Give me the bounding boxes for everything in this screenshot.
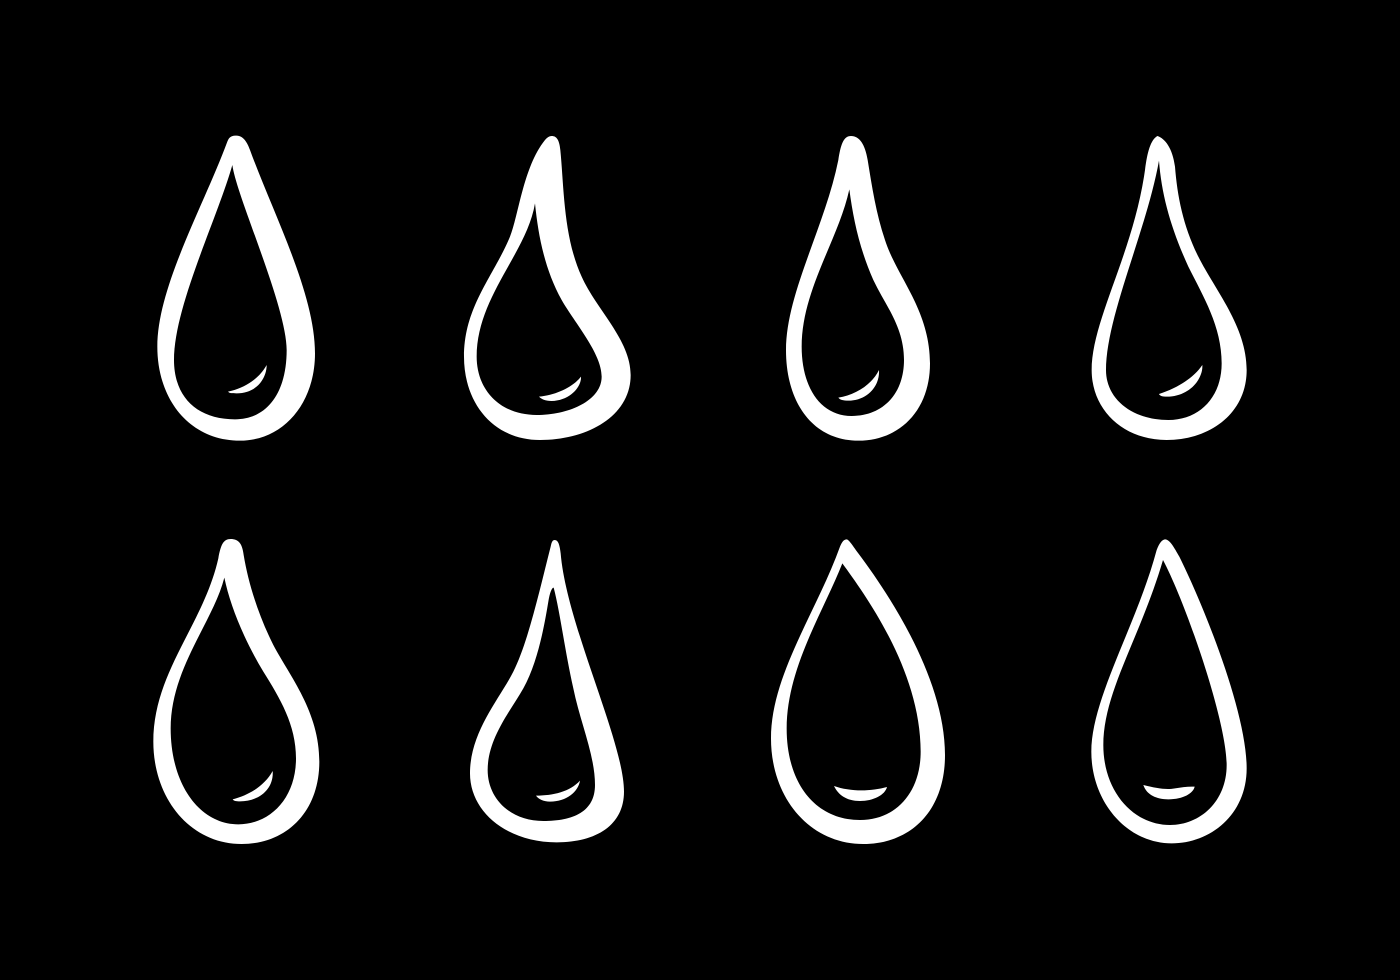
- icon: water drop row 2 column 4: [1091, 539, 1247, 843]
- icon: water drop row 1 column 1: [157, 136, 315, 441]
- icon: water drop row 2 column 3: [771, 539, 945, 844]
- icon: water drop row 2 column 1: [153, 539, 319, 844]
- icon: water drop row 1 column 4: [1092, 136, 1247, 440]
- icon: water drop row 1 column 2: [464, 136, 631, 440]
- icon: water drop row 2 column 2: [470, 540, 624, 842]
- icon: water drop row 1 column 3: [786, 136, 930, 441]
